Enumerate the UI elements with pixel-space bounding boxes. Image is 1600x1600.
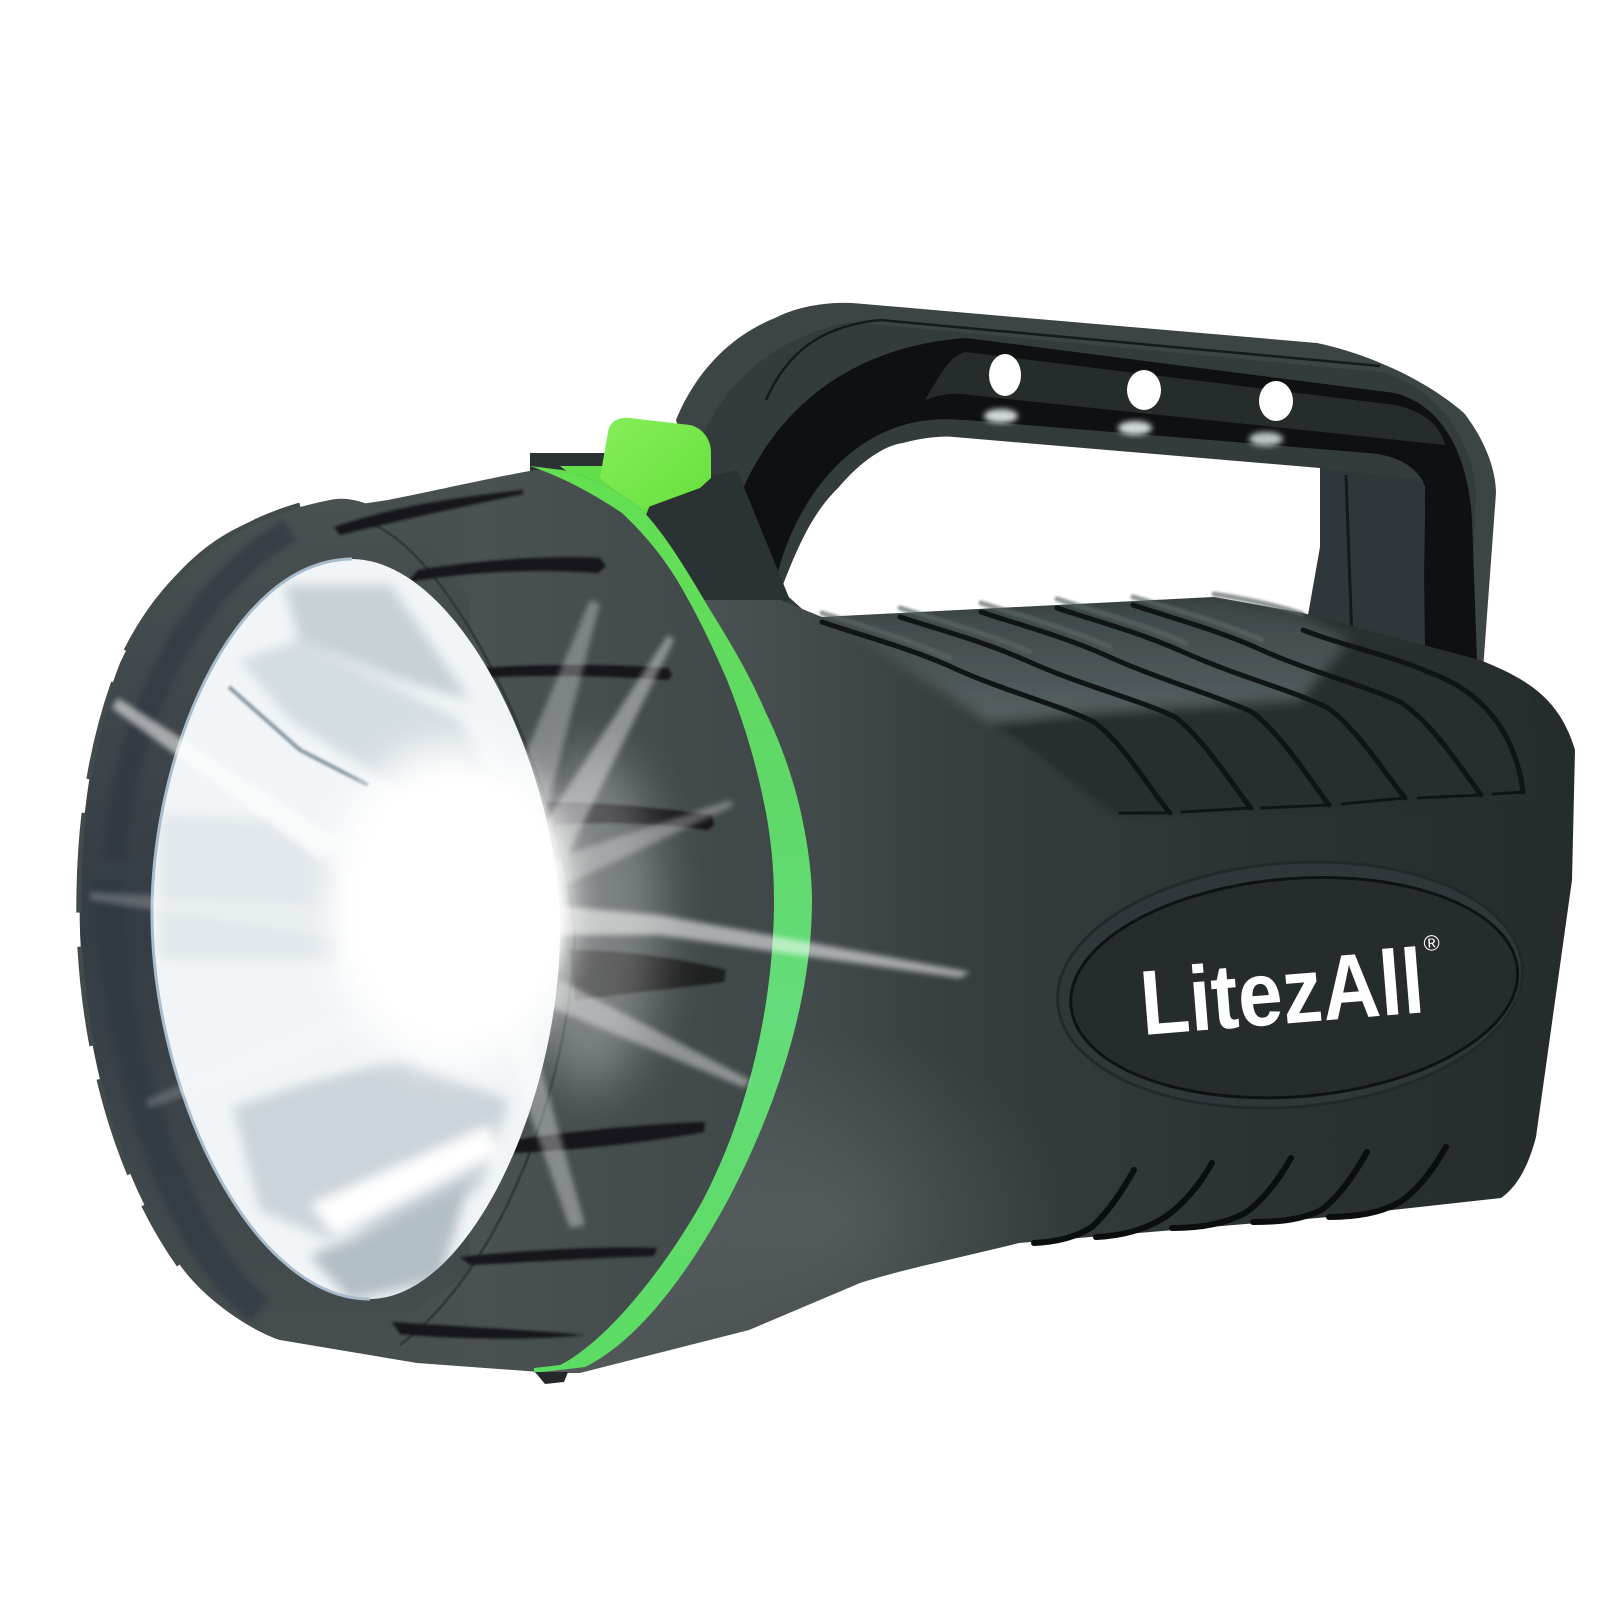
button mount [530, 453, 790, 630]
green slider base [560, 466, 700, 530]
rib highlights [822, 594, 1302, 658]
bezel ring [79, 499, 575, 1345]
head slots [334, 490, 726, 1339]
body top surface [822, 597, 1350, 722]
logo text: ® [1423, 930, 1441, 956]
light rays [90, 600, 970, 1228]
handle light holes [984, 354, 1293, 446]
product illustration: LitezAll spotlight [76, 302, 1575, 1384]
top ribs [822, 605, 1523, 813]
handle opening [781, 437, 1320, 625]
logo text: LitezAll [1136, 930, 1428, 1055]
body [540, 597, 1575, 1410]
bottom ribs [1034, 1147, 1446, 1243]
handle [676, 303, 1496, 670]
light glow [310, 720, 590, 1090]
head shell [80, 470, 812, 1372]
lens reflections [160, 585, 509, 1300]
logo oval [1048, 845, 1532, 1125]
light halo [520, 750, 660, 1090]
green slider button [600, 418, 711, 510]
lens rim [152, 559, 370, 1299]
foot [535, 1372, 568, 1384]
green band [530, 466, 812, 1373]
lens [140, 550, 580, 1310]
